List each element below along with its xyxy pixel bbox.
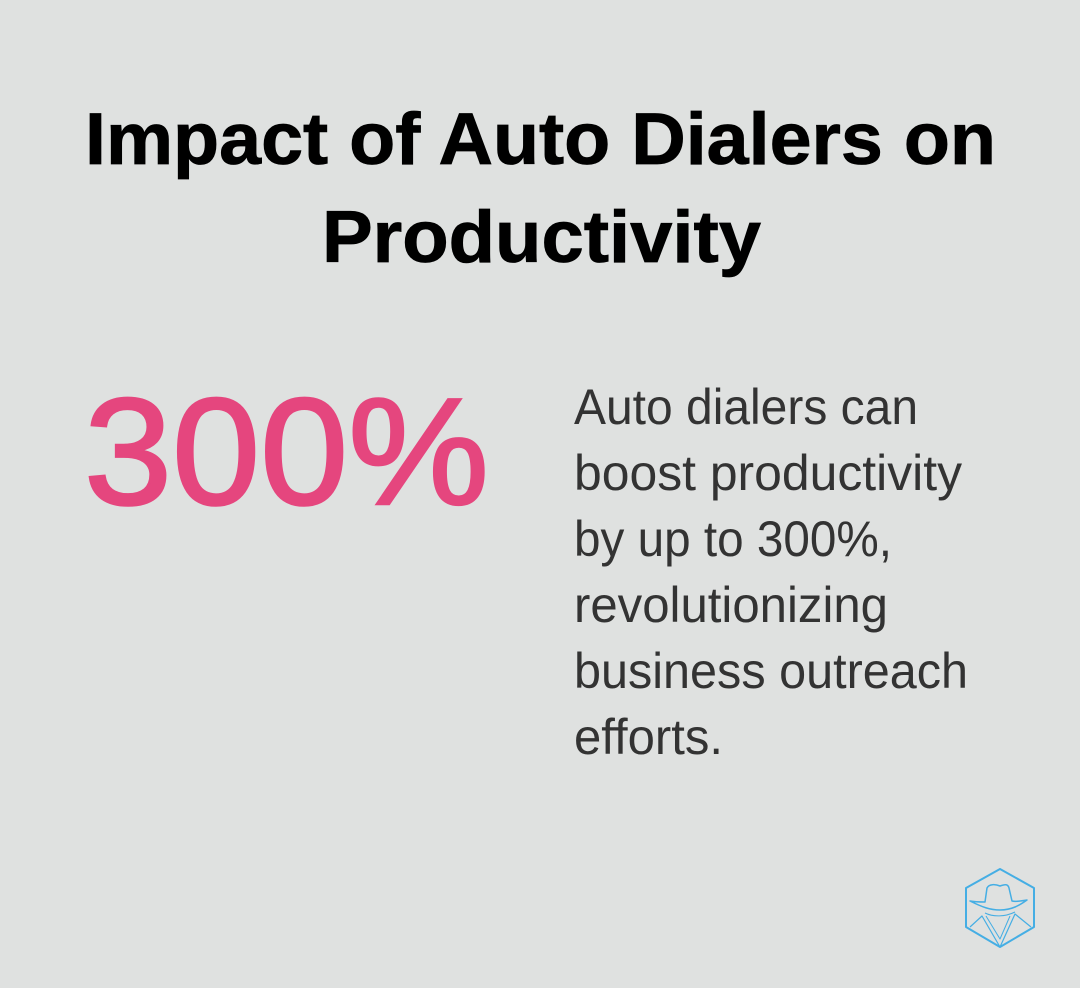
big statistic: 300%: 300% [84,367,489,537]
description text: boost productivity [574,445,962,501]
description text: by up to 300%, [574,511,892,567]
icon: hexagon logo with hat [966,869,1034,947]
description text: efforts. [574,709,723,765]
description text [574,379,968,765]
description text: revolutionizing [574,577,888,633]
title [85,99,996,278]
description text: business outreach [574,643,968,699]
title: Impact of Auto Dialers on [85,99,996,180]
title: Productivity [322,197,761,278]
description text: Auto dialers can [574,379,918,435]
